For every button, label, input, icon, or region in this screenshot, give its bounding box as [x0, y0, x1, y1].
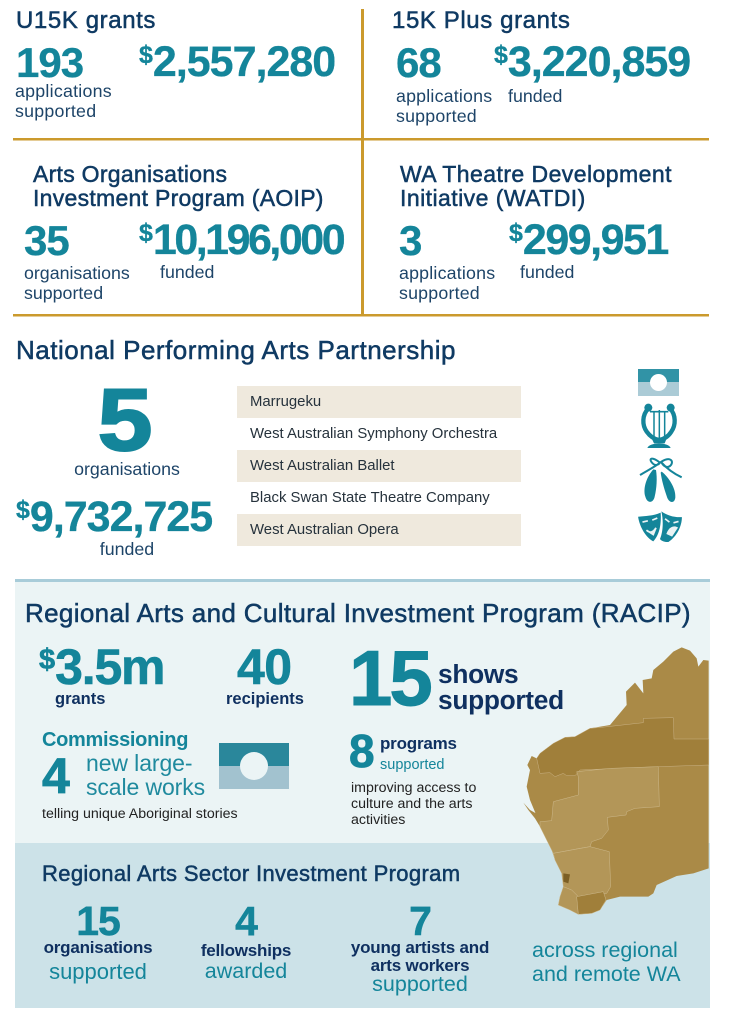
stat: amount: $10,196,000 [139, 216, 343, 264]
heading: U15K grants [16, 7, 156, 34]
label: fellowships [201, 941, 291, 960]
label: funded [100, 539, 154, 559]
heading: WA Theatre Development [400, 161, 672, 187]
panel: Regional Arts Sector Investment Program [15, 843, 710, 1008]
stat: recipients: 40 [237, 639, 291, 695]
great southern region [577, 892, 606, 914]
list row: West Australian Opera [250, 522, 399, 538]
icon: flag [638, 369, 679, 396]
description: telling unique Aboriginal stories [42, 806, 238, 822]
label: applications [15, 81, 112, 101]
label [399, 263, 495, 302]
heading: commissioning: Commissioning [42, 729, 188, 751]
heading: National Performing Arts Partnership [16, 335, 456, 365]
stat: 4: 4 [42, 748, 70, 804]
label: organisations [74, 459, 180, 479]
stat: 68: 68 [396, 39, 441, 86]
label: applications [396, 86, 492, 106]
list row: Black Swan State Theatre Company [250, 490, 490, 506]
heading: Arts Organisations [33, 161, 227, 187]
sublabel: awarded [205, 959, 287, 983]
sublabel: supported [372, 972, 468, 996]
panel: RACIP [15, 579, 710, 843]
stat: 5: 5 [98, 370, 152, 469]
stat: 35: 35 [24, 217, 69, 264]
icon: flag [219, 743, 289, 789]
perth region [563, 873, 570, 883]
description: activities [351, 812, 405, 828]
icon: theatre masks [638, 511, 682, 542]
south west region [558, 887, 578, 914]
stat: 193: 193 [16, 39, 83, 86]
stat: 3: 3 [399, 217, 421, 264]
label [15, 81, 112, 120]
heading [400, 161, 672, 212]
number: 7 [409, 898, 431, 944]
icon: lyre [641, 404, 677, 448]
label: organisations [44, 938, 152, 957]
label: young artists and [351, 938, 489, 957]
label [396, 86, 492, 126]
label: supported [15, 100, 96, 120]
number: 4 [235, 898, 257, 944]
description: culture and the arts [351, 796, 472, 812]
panel: AOIP [24, 161, 344, 302]
list row: West Australian Symphony Orchestra [250, 426, 497, 442]
label: applications [399, 263, 495, 283]
stat: fellowships [201, 898, 291, 983]
label: across regional: across regional [532, 938, 678, 962]
heading: Investment Program (AOIP) [33, 184, 324, 210]
stat: amount: $3,220,859 [494, 38, 690, 86]
list row: Marrugeku [250, 394, 321, 410]
label: funded [160, 262, 214, 282]
label: across regional: and remote WA [532, 962, 681, 986]
panel: U15K grants [15, 7, 335, 120]
label: funded [520, 262, 574, 282]
label: supported [438, 685, 564, 715]
stat: amount: $299,951 [509, 216, 668, 264]
label: recipients [226, 690, 304, 708]
heading: Regional Arts Sector Investment Program [42, 861, 460, 886]
list row [237, 450, 521, 482]
panel: WATDI [399, 161, 672, 302]
stat: 15 shows: 15 [349, 634, 430, 722]
label: supported [399, 282, 480, 302]
stat: young artists [351, 898, 489, 996]
label [86, 750, 205, 800]
label: arts workers [371, 956, 469, 974]
panel: National Performing Arts Partnership [16, 335, 682, 559]
heading: Initiative (WATDI) [400, 184, 586, 210]
label: scale works [86, 774, 205, 800]
heading [32, 161, 324, 212]
list row [237, 386, 521, 418]
label: across regional [532, 938, 681, 986]
stat: amount: $2,557,280 [139, 38, 335, 86]
label [24, 263, 130, 302]
stat: organisations [44, 898, 152, 984]
list row [237, 514, 521, 546]
description [351, 780, 476, 828]
base region [523, 647, 709, 914]
grid dividers [13, 9, 709, 316]
stat: amount: $9,732,725 [16, 493, 212, 541]
map: Western Australia [524, 647, 709, 915]
label: supported [380, 757, 444, 773]
label: supported [396, 106, 477, 126]
label: grants [55, 690, 105, 708]
icon: ballet slippers [640, 458, 682, 502]
label: new large- [86, 750, 192, 776]
wheatbelt region [553, 847, 611, 897]
label: shows [438, 659, 518, 689]
stat: 8: 8 [349, 725, 375, 777]
label: funded [508, 86, 562, 106]
label [351, 938, 489, 974]
number: 15 [76, 898, 120, 944]
dark band region [537, 718, 709, 777]
panel: 15K Plus grants [392, 7, 690, 126]
label: organisations [24, 263, 130, 283]
sublabel: supported [49, 959, 147, 984]
label [438, 659, 564, 715]
heading: Regional Arts and Cultural Investment Program (RACIP) [25, 598, 691, 628]
goldfields region [540, 767, 659, 853]
stat: grants: $3.5m [39, 639, 164, 695]
heading: 15K Plus grants [392, 7, 570, 34]
description: improving access to [351, 780, 476, 796]
label: programs [380, 734, 457, 753]
label: supported [24, 282, 103, 302]
list row: West Australian Ballet [250, 458, 395, 474]
